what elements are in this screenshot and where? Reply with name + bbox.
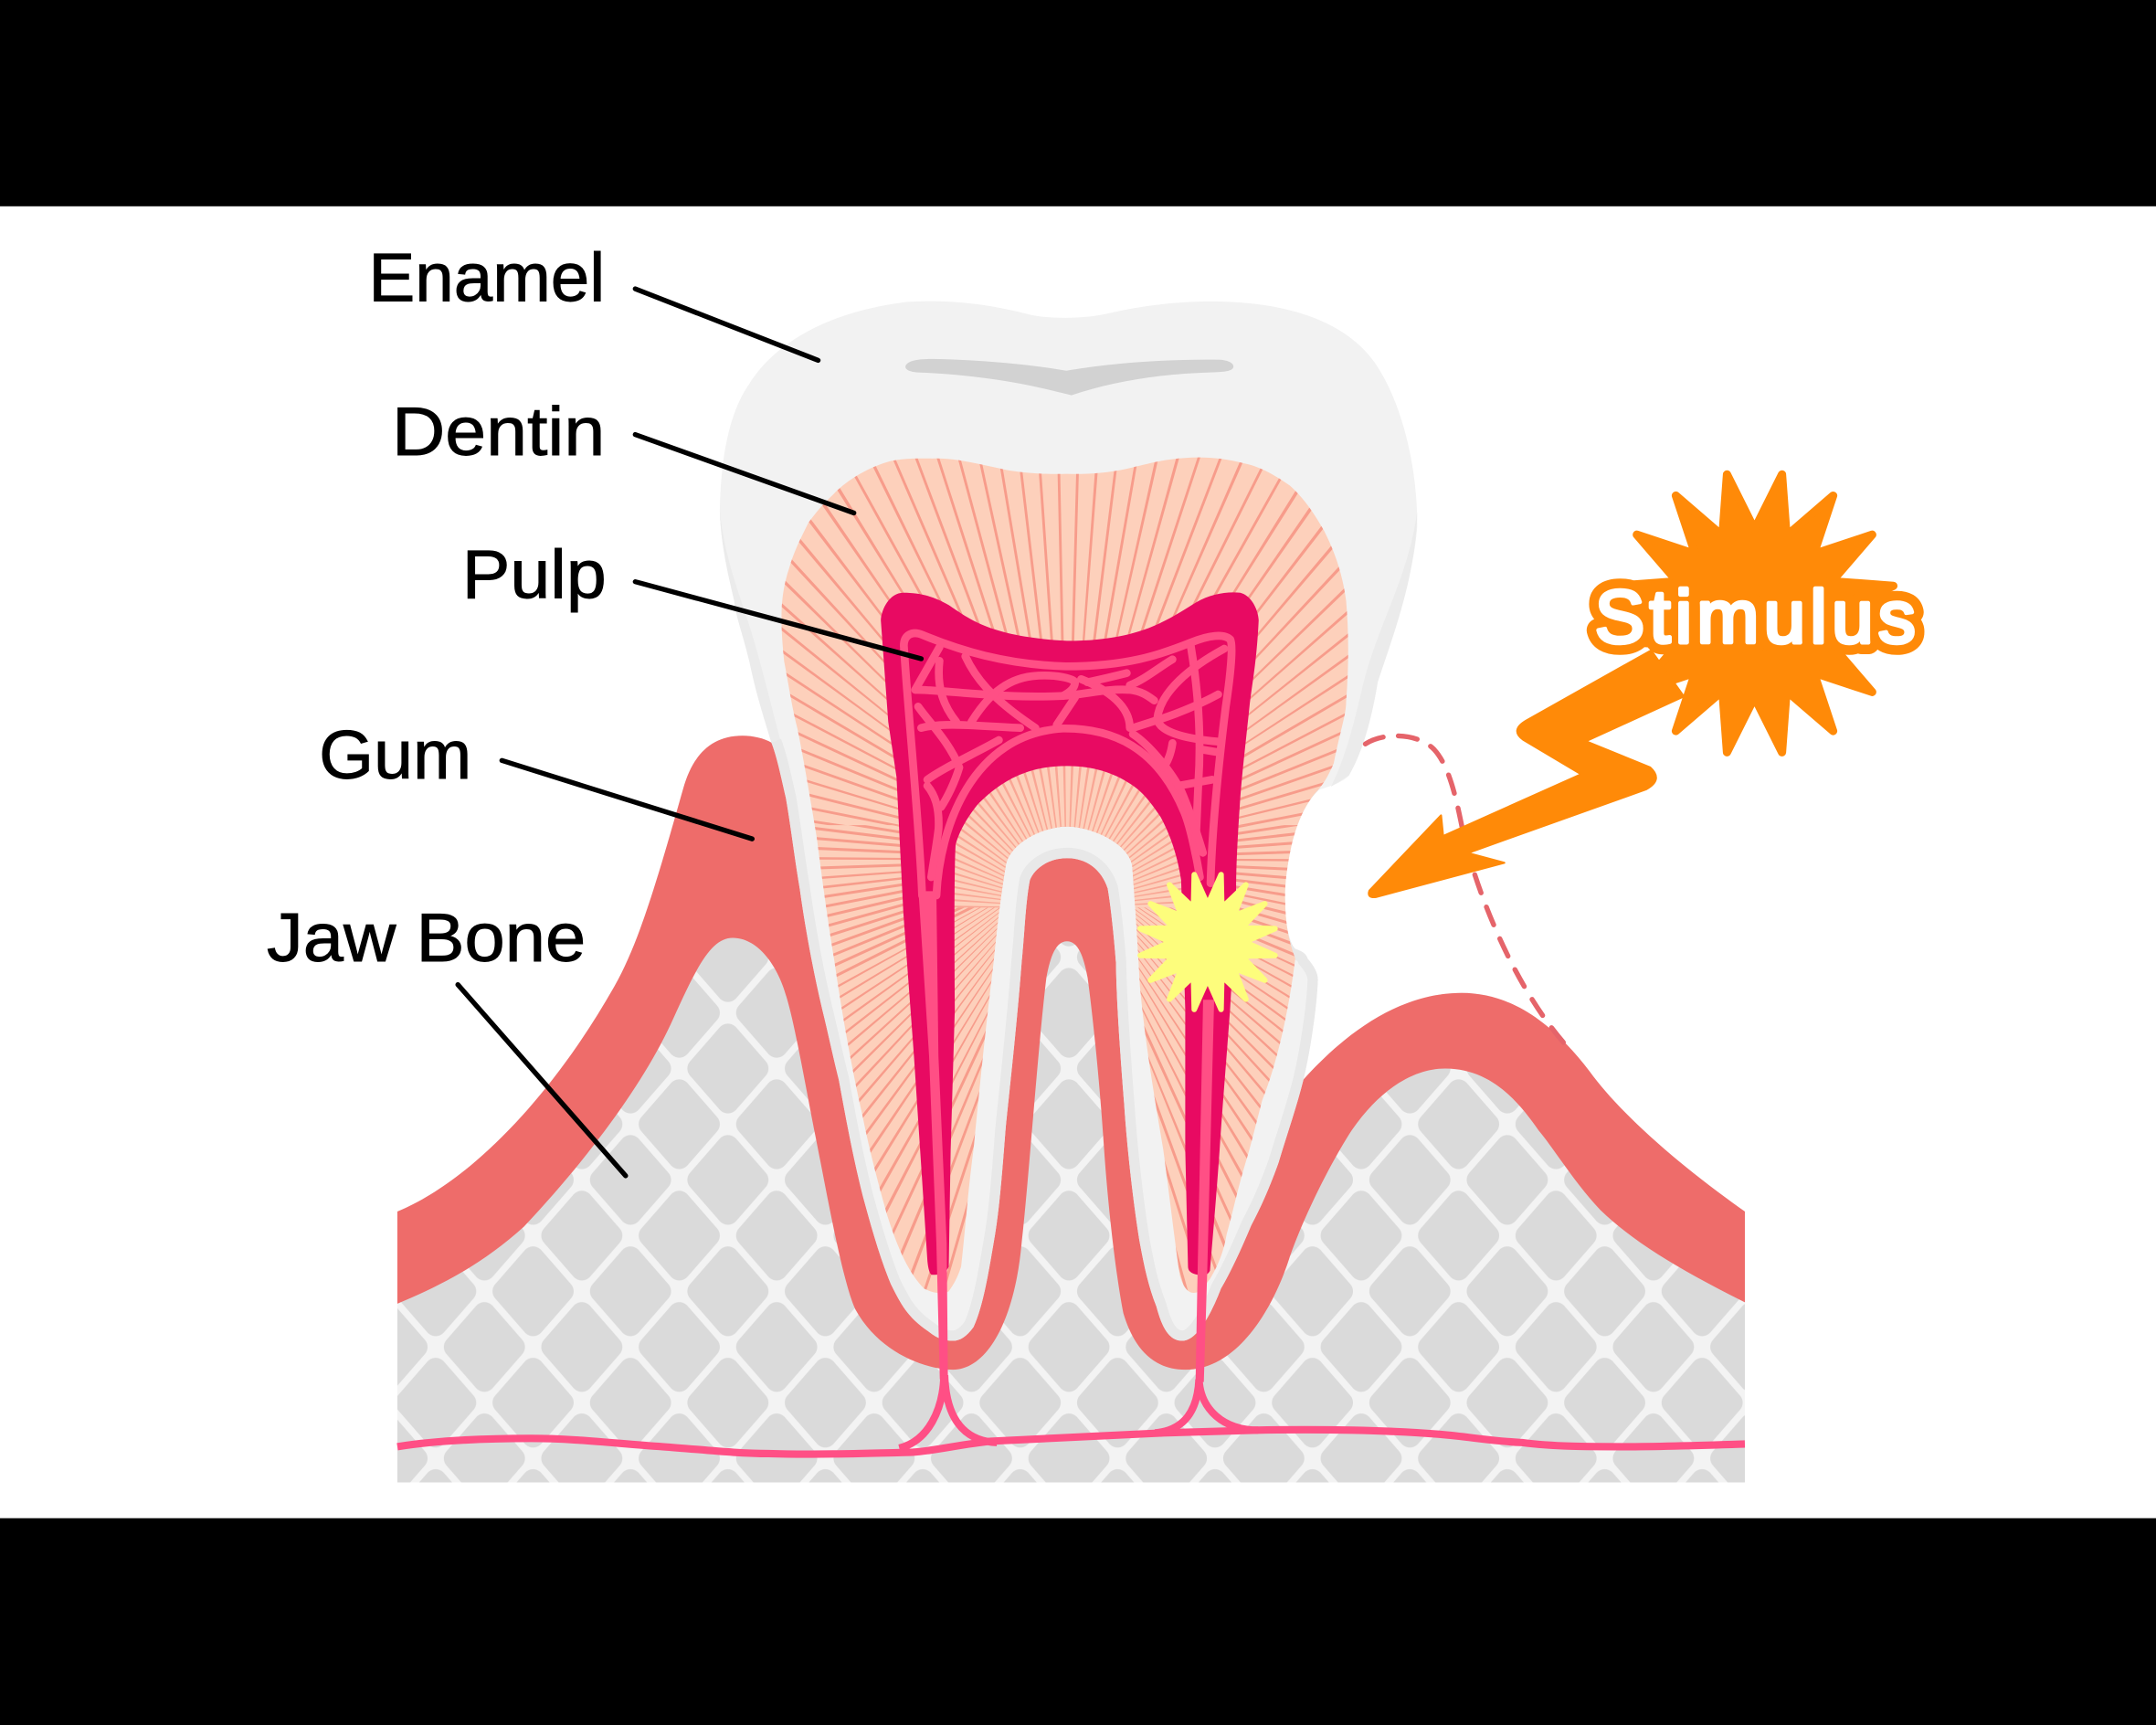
label: Jaw Bone (267, 899, 626, 1176)
root enamel shading (771, 743, 1318, 1340)
enamel (720, 302, 1417, 1340)
white panel (0, 206, 2156, 1519)
label: Dentin: Dentin (392, 393, 605, 470)
dashed receded gum line (1366, 736, 1563, 1042)
pulp nerve network (904, 633, 1231, 895)
infographic: tooth cross-section (0, 206, 2156, 1519)
label: Gum (319, 716, 752, 839)
pain burst: yellow star (1140, 874, 1275, 1010)
label: Gum: Gum (319, 716, 471, 793)
label: Enamel (368, 239, 819, 360)
icon: orange burst (1615, 474, 1894, 752)
pulp (881, 592, 1259, 1275)
Stimulus word: Stimulus (1595, 576, 1916, 659)
enamel shading right (1331, 512, 1417, 787)
label: Pulp: Pulp (462, 536, 607, 613)
label: Pulp (462, 536, 921, 659)
label: Jaw Bone: Jaw Bone (267, 899, 586, 976)
arrow: lightning bolt (1369, 651, 1684, 897)
dentin (782, 457, 1348, 1293)
stimulus callout (1369, 474, 1916, 897)
jaw nerve line (397, 1375, 1745, 1455)
jaw bone (397, 688, 1745, 1483)
gum (397, 688, 1745, 1370)
Stimulus word outline: Stimulus (1595, 576, 1916, 659)
crown groove (905, 359, 1233, 396)
enamel shading left (720, 510, 781, 743)
dentin tubules (724, 515, 1411, 1203)
root nerve trunks (918, 891, 1214, 1382)
tooth (720, 302, 1417, 1382)
label: Dentin (392, 393, 854, 513)
label: Enamel: Enamel (368, 239, 605, 316)
